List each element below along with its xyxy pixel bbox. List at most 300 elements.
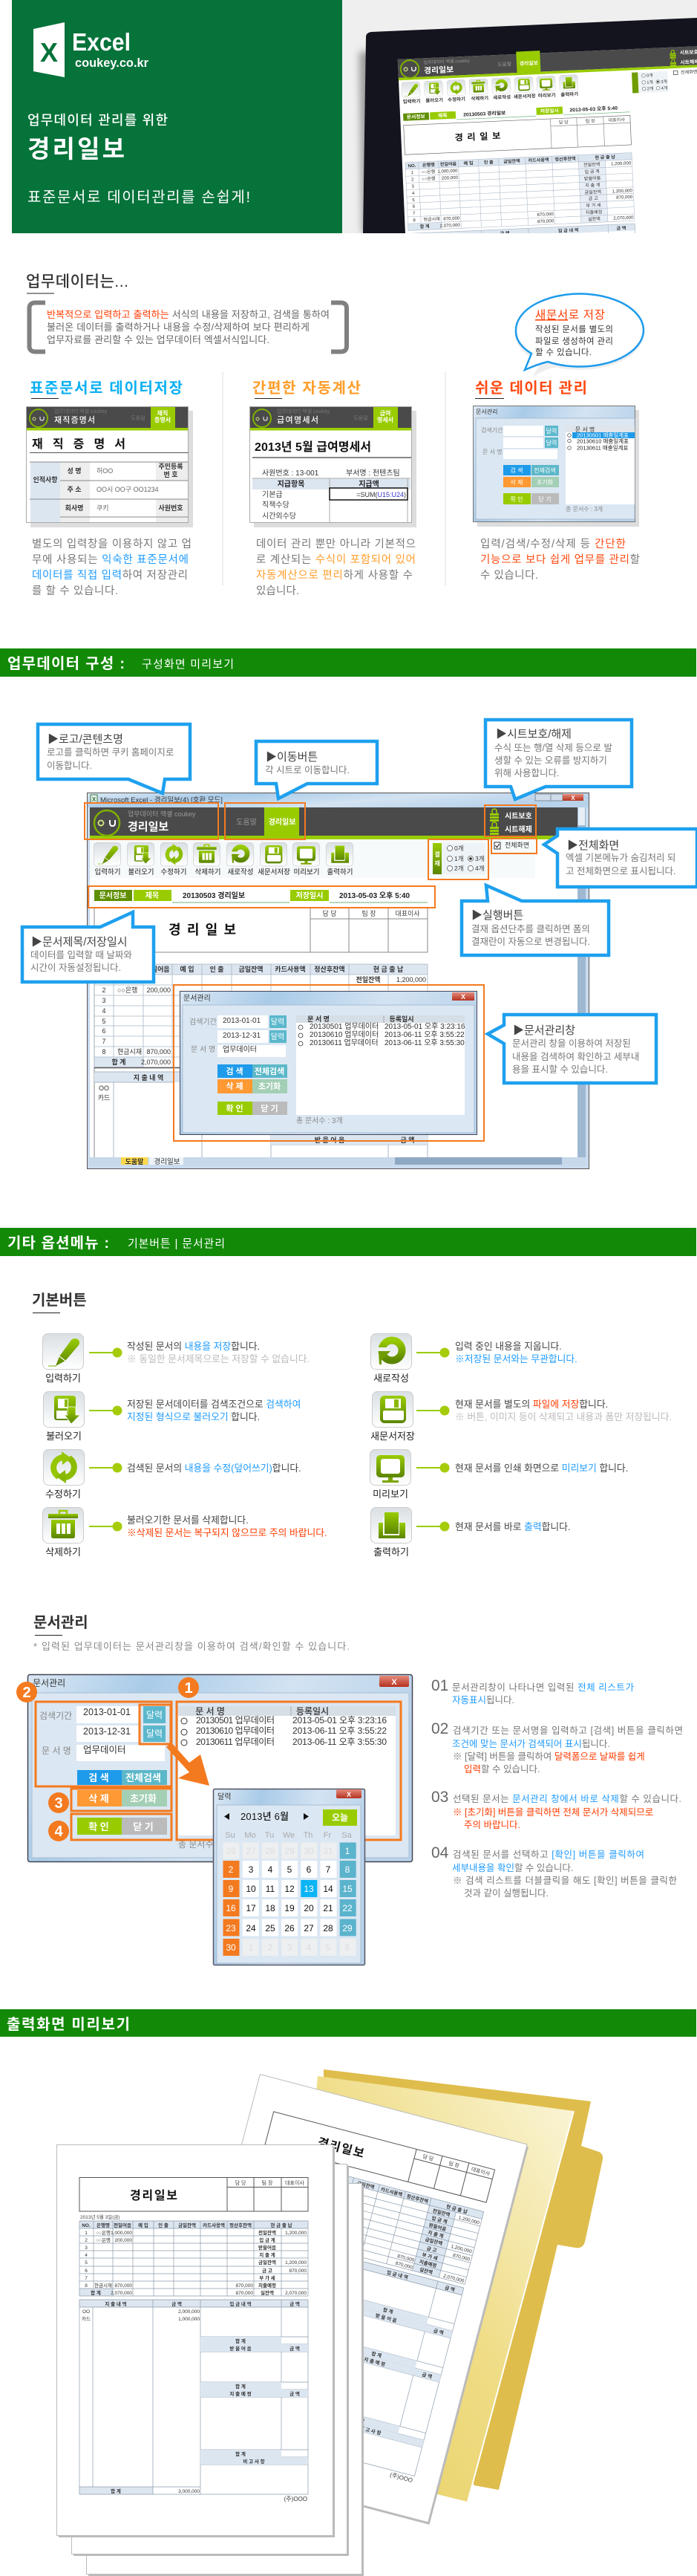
document info row: 2013-05-03 오후 5:40 [339,891,410,900]
document manager dialog: 문서관리 [183,994,211,1003]
monitor illustration: 부 가 세 [586,202,601,209]
button item: 삭제하기 [43,1508,327,1558]
front printed page: 입 금 내 역 [229,2300,252,2307]
dialog: 문서관리: 2013-01-01 [83,1707,131,1717]
description: 수 있습니다. [480,569,538,582]
daily report sheet: 경 리 일 보 [168,923,236,937]
daily report sheet: OO [99,1084,109,1092]
callout: 시트보호/해제: 생할 수 있는 오류를 방지하기 [494,755,607,766]
section band: 업무데이터 구성 [0,648,696,677]
back printed page: 지 출 계 [427,2229,445,2240]
button item: 출력하기: 출력하기 [373,1546,409,1558]
dialog: 문서관리: 총 문서수 [178,1839,214,1850]
number badges: 4 [54,1824,63,1840]
back printed page: 받을어음 [428,2222,447,2232]
monitor illustration: 금 액 [616,225,626,231]
calendar popup: 21 [323,1903,333,1913]
front printed page: 2,000,000 [178,2309,200,2315]
description: 기능으로 보다 쉽게 업무를 관리할 [480,553,640,566]
back printed page: 입 금 계 [431,2214,448,2225]
step 02 [431,1720,683,1775]
document manager dialog: 2013-06-11 오후 3:55:22 [385,1030,465,1039]
sheet tabs [90,1157,586,1166]
monitor illustration: 4개 [661,85,667,91]
daily report sheet: 현금시재 [117,1048,142,1056]
step 01: 자동표시됩니다. [452,1695,514,1705]
front printed page: 870,000 [236,2291,253,2296]
front printed page: ○○은행 [96,2237,111,2243]
front printed page: 정산후잔액 [229,2222,252,2228]
daily report sheet: 담 당 [322,909,337,917]
screenshot: 재직증명서: 주민등록 [158,463,183,470]
front printed page: 200,000 [114,2238,132,2243]
back printed page: 팀 장 [448,2160,460,2169]
bracket text block: 불러온 데이터를 출력하거나 내용을 수정/삭제하여 보다 편리하게 [47,322,310,333]
monitor illustration: 미리보기 [538,91,556,99]
callout: 시트보호/해제: ▶시트보호/해제 [496,728,572,741]
back printed page: 금 고 [426,2245,437,2254]
monitor illustration: 제목 [438,112,448,119]
calendar popup: X [347,1791,351,1798]
back printed page: 금일잔액 [425,2236,443,2247]
button item: 미리보기: 미리보기 [373,1489,408,1500]
front printed page: 인 출 [158,2222,168,2228]
button item: 입력하기: 입력하기 [45,1373,81,1384]
folder [297,2069,603,2502]
document manager dialog: 2013-05-01 오후 3:23:16 [385,1022,465,1031]
daily report sheet: 받 을 어 음 [315,1136,344,1144]
monitor illustration: 8 [413,218,416,223]
calendar popup: 1 [345,1846,350,1856]
calendar popup: Th [304,1831,312,1840]
callout: 문서관리창: 문서관리 창을 이용하여 저장된 [512,1038,631,1049]
monitor illustration: 금 고 [589,196,598,201]
dialog: 문서관리: 2013-05-01 오후 3:23:16 [292,1715,387,1726]
front printed page: 전일어음 [114,2222,131,2228]
step 04: ※ 검색 리스트를 더블클릭을 해도 [확인] 버튼을 클릭한 [453,1876,677,1886]
front printed page: 금 고 [262,2268,272,2274]
calendar popup: 10 [246,1884,256,1894]
fullscreen checkbox: 전체화면 [505,842,529,849]
monitor illustration: 경리일보 [520,59,538,67]
screenshot: 급여명세서: =SUM(U15:U24) [356,491,406,498]
calendar popup: Su [225,1831,235,1840]
document manager dialog: 2013-06-11 오후 3:55:30 [385,1038,465,1047]
section: 업무데이터는 [26,273,644,597]
description: 데이터 관리 뿐만 아니라 기본적으 [256,538,416,550]
description: 로 계산되는 수식이 포함되어 있어 [256,553,416,566]
back printed page: 경 리 일 보 [316,2136,366,2161]
monitor illustration: 받을어음 [584,175,601,182]
monitor illustration: 금일잔액 [503,158,520,165]
front printed page: OO [82,2309,90,2315]
excel window frame: Microsoft Excel - 경리일보(4) [호환 모드] [100,796,223,804]
dialog: 문서관리: 등록일시 [296,1706,329,1717]
back printed page: 현 금 출 납 [445,2203,468,2215]
front printed page: 비 고 사 항 [243,2458,265,2465]
daily report sheet: 전일잔액 [356,975,381,983]
back printed page: 예 입 [318,2170,329,2179]
calendar popup: 19 [284,1903,295,1913]
screenshot: 재직증명서: 재직 [157,409,168,417]
back printed page: 금 액 [422,2371,433,2380]
back printed page: 실잔액 [419,2266,433,2276]
speech bubble: 작성된 문서를 별도의 [535,325,613,334]
callout: 전체화면: ▶전체화면 [567,839,619,852]
front printed page: 금 액 [171,2300,182,2307]
front printed page: 1 [85,2231,88,2236]
screenshot: 급여명세서: 직책수당 [262,501,289,510]
monitor illustration: 입력하기 [402,97,421,105]
document manager dialog: X [461,993,465,1001]
button item: 새로작성: 새로작성 [373,1373,409,1384]
document info row: 제목 [145,891,159,900]
document manager dialog: 전체검색 [255,1067,284,1076]
step 03: 주의 바랍니다. [464,1820,520,1830]
number badges: 1 [184,1680,193,1697]
screenshot: 재직증명서: 도움말 [131,415,145,421]
daily report sheet: 3 [102,997,106,1004]
document manager dialog: 달력 [271,1018,284,1027]
description [480,538,640,582]
front printed page: (주)OOO [284,2496,307,2502]
approval radio panel: 3개 [475,855,485,862]
toolbar icons: 새문서저장 [258,868,290,876]
calendar popup: 6 [345,1942,350,1953]
callout: 전체화면: 엑셀 기본메뉴가 숨김처리 되 [566,853,675,863]
step 01: 문서관리창이 나타나면 입력된 전체 리스트가 [452,1682,634,1693]
calendar popup: 14 [323,1884,333,1894]
monitor illustration: 합 계 [420,224,430,230]
document info row: 저장일시 [296,891,323,900]
back printed page: 정산후잔액 [406,2193,429,2205]
screenshot: 문서관리: 20130501 매출일계표 [577,431,629,438]
button item: 삭제하기: 불러오기한 문서를 삭제합니다. [127,1515,249,1526]
toolbar icons: 입력하기 [95,868,120,876]
screenshot: 급여명세서 [249,407,416,527]
monitor illustration: 3 [411,185,415,189]
daily report sheet: 2,070,000 [141,1058,171,1066]
back printed page: (주)OOO [389,2471,413,2484]
monitor illustration: 2 [411,178,414,182]
calendar popup: 11 [266,1884,275,1894]
dialog: 문서관리: X [391,1678,397,1687]
front printed page: ○○은행 [96,2229,111,2236]
screenshot: 재직증명서 [27,407,193,527]
document manager dialog: 문 서 명 [191,1045,215,1054]
monitor illustration: 2,070,000 [439,224,461,229]
calendar popup: Fr [324,1831,332,1840]
document manager dialog: 초기화 [258,1081,281,1091]
screenshot: 재직증명서: OO시 OO구 OO1234 [96,486,159,493]
back printed page: 2,070,000 [442,2274,465,2284]
monitor illustration: 지 출 계 [585,182,601,189]
description: 있습니다. [256,585,299,597]
annotated excel window [22,720,697,1169]
button item: 수정하기: 수정하기 [45,1489,81,1500]
screenshot: 문서관리: 닫 기 [539,495,551,503]
document manager dialog: 검 색 [226,1067,243,1076]
dialog: 문서관리: 닫 기 [133,1821,154,1832]
front printed page: 7 [85,2276,88,2281]
screenshot: 문서관리: 달력 [546,427,557,435]
toolbar icons [90,839,535,878]
button item: 불러오기 [43,1392,301,1442]
calendar popup: 27 [304,1923,314,1933]
monitor illustration: 담 당 [559,119,569,126]
front printed page: 8 [85,2283,88,2289]
sheet tabs: 도움말 [125,1157,144,1165]
calendar popup: 24 [246,1923,256,1933]
monitor illustration: 금일잔액 [584,189,601,195]
button item: 입력하기: ※ 동일한 문서제목으로는 저장할 수 없습니다. [127,1353,310,1365]
front printed page: 2,070,000 [111,2291,132,2296]
dialog: 문서관리: 전체검색 [125,1772,161,1783]
callout: 시트보호/해제: 수식 또는 행/열 삭제 등으로 발 [494,742,612,753]
back printed page: 지 출 예 정 [363,2355,386,2368]
monitor illustration: 5 [412,198,415,203]
monitor illustration: 870,000 [443,217,460,221]
section: 문서관리 [16,1614,683,1965]
document manager dialog: 닫 기 [261,1103,278,1113]
screenshot: 재직증명서: 재직증명서 [54,415,95,425]
speech bubble [514,294,644,377]
excel header bar: 시트해제 [505,824,532,834]
front printed page: 합 계 [235,2338,246,2344]
calendar popup: 오늘 [332,1812,348,1823]
excel brand text: coukey.co.kr [75,56,148,70]
calendar popup: 15 [342,1884,353,1894]
monitor illustration: ○○은행 [421,169,435,175]
document manager dialog: 삭 제 [226,1081,243,1091]
front printed page [56,2145,335,2537]
calendar popup: 1 [249,1942,254,1953]
screenshot: 재직증명서: 회사명 [65,504,83,512]
monitor illustration [342,0,697,233]
toolbar icons: 삭제하기 [195,868,220,876]
screenshot: 재직증명서: 허OO [96,467,113,475]
step 02: 02 [431,1720,448,1737]
monitor illustration: 인 출 [484,159,494,166]
description: 입력/검색/수정/삭제 등 간단한 [480,538,626,550]
callout: 전체화면 [544,829,697,887]
calendar popup: 29 [342,1923,353,1933]
front printed page: 금 액 [289,2345,300,2352]
heading: 업무데이터는... [26,273,128,290]
excel header bar: 경리일보 [128,821,168,833]
button item: 미리보기 [370,1450,628,1500]
column: 간편한 자동계산: 간편한 자동계산 [252,380,361,397]
back printed page: 전일잔액 [432,2207,451,2218]
monitor illustration: 예 입 [463,160,474,166]
front printed page: 은행명 [96,2222,110,2228]
front printed page: 받 을 어 음 [229,2345,252,2352]
button item: 삭제하기: ※삭제된 문서는 복구되지 않으므로 주의 바랍니다. [127,1527,327,1538]
screenshot: 급여명세서: 2013년 5월 급여명세서 [255,440,371,454]
icon: excel logo [33,22,65,77]
toolbar icons: 불러오기 [128,868,154,876]
description: 데이터를 직접 입력하여 저장관리 [32,569,188,582]
screenshot: 문서관리: 전체검색 [534,466,556,474]
step 04: 세부내용을 확인할 수 있습니다. [452,1863,573,1873]
monitor illustration: 불러오기 [425,97,443,104]
calendar popup: 4 [307,1942,312,1953]
toolbar icons: 수정하기 [161,868,186,876]
calendar popup: 3 [249,1864,254,1875]
calendar popup: 16 [226,1903,236,1913]
front printed page: 금일잔액 [178,2222,196,2228]
monitor illustration: 전체화면 [681,69,697,75]
back printed page: 1,200,000 [451,2244,473,2254]
step 02: 입력할 수 있습니다. [464,1764,540,1775]
front printed page: 870,000 [236,2283,253,2289]
front printed page: 5 [85,2260,88,2266]
monitor illustration: 1 [411,171,414,175]
hero subtitle: 업무데이터 관리를 위한 [27,113,168,128]
monitor illustration: 출력하기 [560,91,578,98]
back printed page: 대표이사 [471,2166,491,2177]
monitor illustration: 2,070,000 [613,216,634,221]
calendar popup: 3 [287,1942,292,1953]
monitor illustration: NO. [408,164,416,169]
daily report sheet [94,908,428,1157]
button item: 입력하기: 작성된 문서의 내용을 저장합니다. [127,1341,260,1352]
monitor illustration: 지 출 내 역 [435,232,456,239]
button item: 미리보기: 현재 문서를 인쇄 화면으로 미리보기 합니다. [455,1463,628,1474]
monitor illustration: 경리일보 [424,65,454,76]
screenshot: 급여명세서: 급여 [380,409,390,417]
daily report sheet: 2 [102,986,106,994]
dialog: 문서관리: 검색기간 [39,1711,72,1721]
hero title: 경리일보 [27,135,125,163]
callout: 문서관리창: 용을 표시할 수 있습니다. [512,1064,608,1075]
calendar popup: 22 [342,1903,353,1913]
callout: 문서제목/저장일시: ▶문서제목/저장일시 [31,936,128,949]
callout: 문서제목/저장일시: 시간이 자동설정됩니다. [30,963,121,973]
dialog: 문서관리: 2013-06-11 오후 3:55:22 [292,1726,387,1736]
back printed page: 입 금 내 역 [386,2268,409,2280]
screenshot: 문서관리: 확 인 [511,495,523,503]
document manager dialog: 확 인 [226,1103,243,1113]
description: 무에 사용되는 익숙한 표준문서에 [32,553,189,566]
step 04 [431,1844,677,1899]
toolbar icons: 출력하기 [327,868,353,876]
back printed page: 비 고 사 항 [359,2424,382,2436]
front printed page: 1,000,000 [111,2231,132,2236]
monitor illustration: 870,000 [616,195,633,201]
daily report sheet: 지 출 내 역 [134,1073,163,1082]
monitor illustration: 3개 [661,79,667,85]
bracket text block [30,303,347,352]
calendar popup: 29 [284,1846,295,1856]
dialog: 문서관리: 검 색 [88,1772,109,1783]
screenshot: 문서관리: 문서관리 [476,408,497,415]
back printed page: 870,000 [396,2254,415,2263]
callout: 문서관리창 [488,1015,656,1083]
document manager dialog: 20130610 업무데이터 [310,1030,379,1039]
excel window frame: X [571,795,575,801]
monitor illustration: 실잔액 [588,216,601,222]
sheet tabs: 경리일보 [154,1157,180,1166]
daily report sheet: 4 [102,1007,106,1015]
icon: excel logo: X [40,37,58,68]
callout: 이동버튼: 각 시트로 이동합니다. [265,765,350,775]
monitor illustration: 팀 장 [586,118,595,124]
screenshot: 문서관리 [474,406,639,527]
monitor illustration: 저장일시 [540,107,559,114]
front printed page: 합 계 [235,2450,246,2457]
step 02: 검색기간 또는 문서명을 입력하고 [검색] 버튼을 클릭하면 [453,1726,683,1736]
front printed page: 870,000 [114,2283,132,2289]
step 04: 것과 같이 실행됩니다. [464,1887,549,1899]
button item: 새로작성: ※저장된 문서와는 무관합니다. [455,1353,577,1365]
section band: 출력화면 미리보기 [0,2009,696,2037]
dialog: 문서관리: 20130501 업무데이터 [196,1715,275,1726]
back printed page: 받 을 어 음 [375,2312,398,2324]
button item: 수정하기 [43,1450,301,1500]
screenshot: 급여명세서: 업무데이터 액셀 coukey [277,408,330,414]
description: 를 할 수 있습니다. [32,585,118,597]
monitor illustration: 경 리 일 보 [454,131,501,143]
front printed page: 4 [85,2253,88,2258]
calendar popup: 28 [323,1923,333,1933]
calendar popup: 5 [326,1942,331,1953]
dialog: 문서관리: 업무데이터 [83,1745,126,1755]
button item: 수정하기: 검색된 문서의 내용을 수정(덮어쓰기)합니다. [127,1463,301,1474]
front printed page: 합 계 [91,2289,101,2296]
number badges: 3 [54,1795,63,1812]
back printed page: 합 계 [353,2416,365,2424]
dialog: 문서관리: 2013-12-31 [83,1726,131,1737]
front printed page: 지 출 계 [259,2251,275,2258]
approval radio panel: 재 [434,859,440,867]
monitor illustration: 2013-05-03 오후 5:40 [569,105,618,113]
monitor illustration: ○○은행 [422,175,436,182]
screenshot: 급여명세서: 지급액 [359,480,379,489]
front printed page: 예 입 [138,2222,148,2228]
screenshot: 문서관리: 문 서 명 [575,426,595,433]
front printed page: 2013년 5월 3일(금) [80,2214,120,2220]
monitor illustration: 전일잔액 [583,161,601,168]
calendar popup: Mo [244,1831,256,1840]
document manager dialog: 20130611 업무데이터 [310,1038,379,1047]
screenshot: 문서관리: 20130611 매출일계표 [577,444,628,452]
calendar popup: 18 [265,1903,275,1913]
excel window frame [88,793,589,1169]
approval radio panel: 1개 [454,855,464,862]
screenshot: 급여명세서: 도움말 [353,415,368,421]
calendar popup: 26 [226,1846,236,1856]
column: 표준문서로 데이터저장 [27,380,193,597]
dialog: 문서관리: 확 인 [88,1821,109,1832]
step 03: ※ [초기화] 버튼을 클릭하면 전체 문서가 삭제되므로 [453,1807,653,1818]
monitor illustration: 지출예정 [586,209,602,215]
calendar popup: 26 [284,1923,295,1933]
callout: 이동버튼: ▶이동버튼 [266,751,318,764]
document manager dialog: 문 서 명 [307,1015,330,1023]
front printed page: 카드 [82,2315,91,2322]
speech bubble: 파일로 생성하여 관리 [535,336,613,346]
monitor illustration: 금 액 [500,230,510,236]
excel brand text [72,28,148,70]
calendar popup: Sa [341,1831,353,1840]
callout: 문서관리창: ▶문서관리창 [513,1024,575,1037]
screenshot: 재직증명서: 번 호 [163,470,178,478]
monitor illustration: 1,200,000 [612,189,633,194]
front printed page: 부 가 세 [259,2274,275,2281]
calendar popup: 17 [246,1903,256,1913]
step 03: 선택된 문서는 문서관리 창에서 바로 삭제할 수 있습니다. [453,1794,681,1804]
